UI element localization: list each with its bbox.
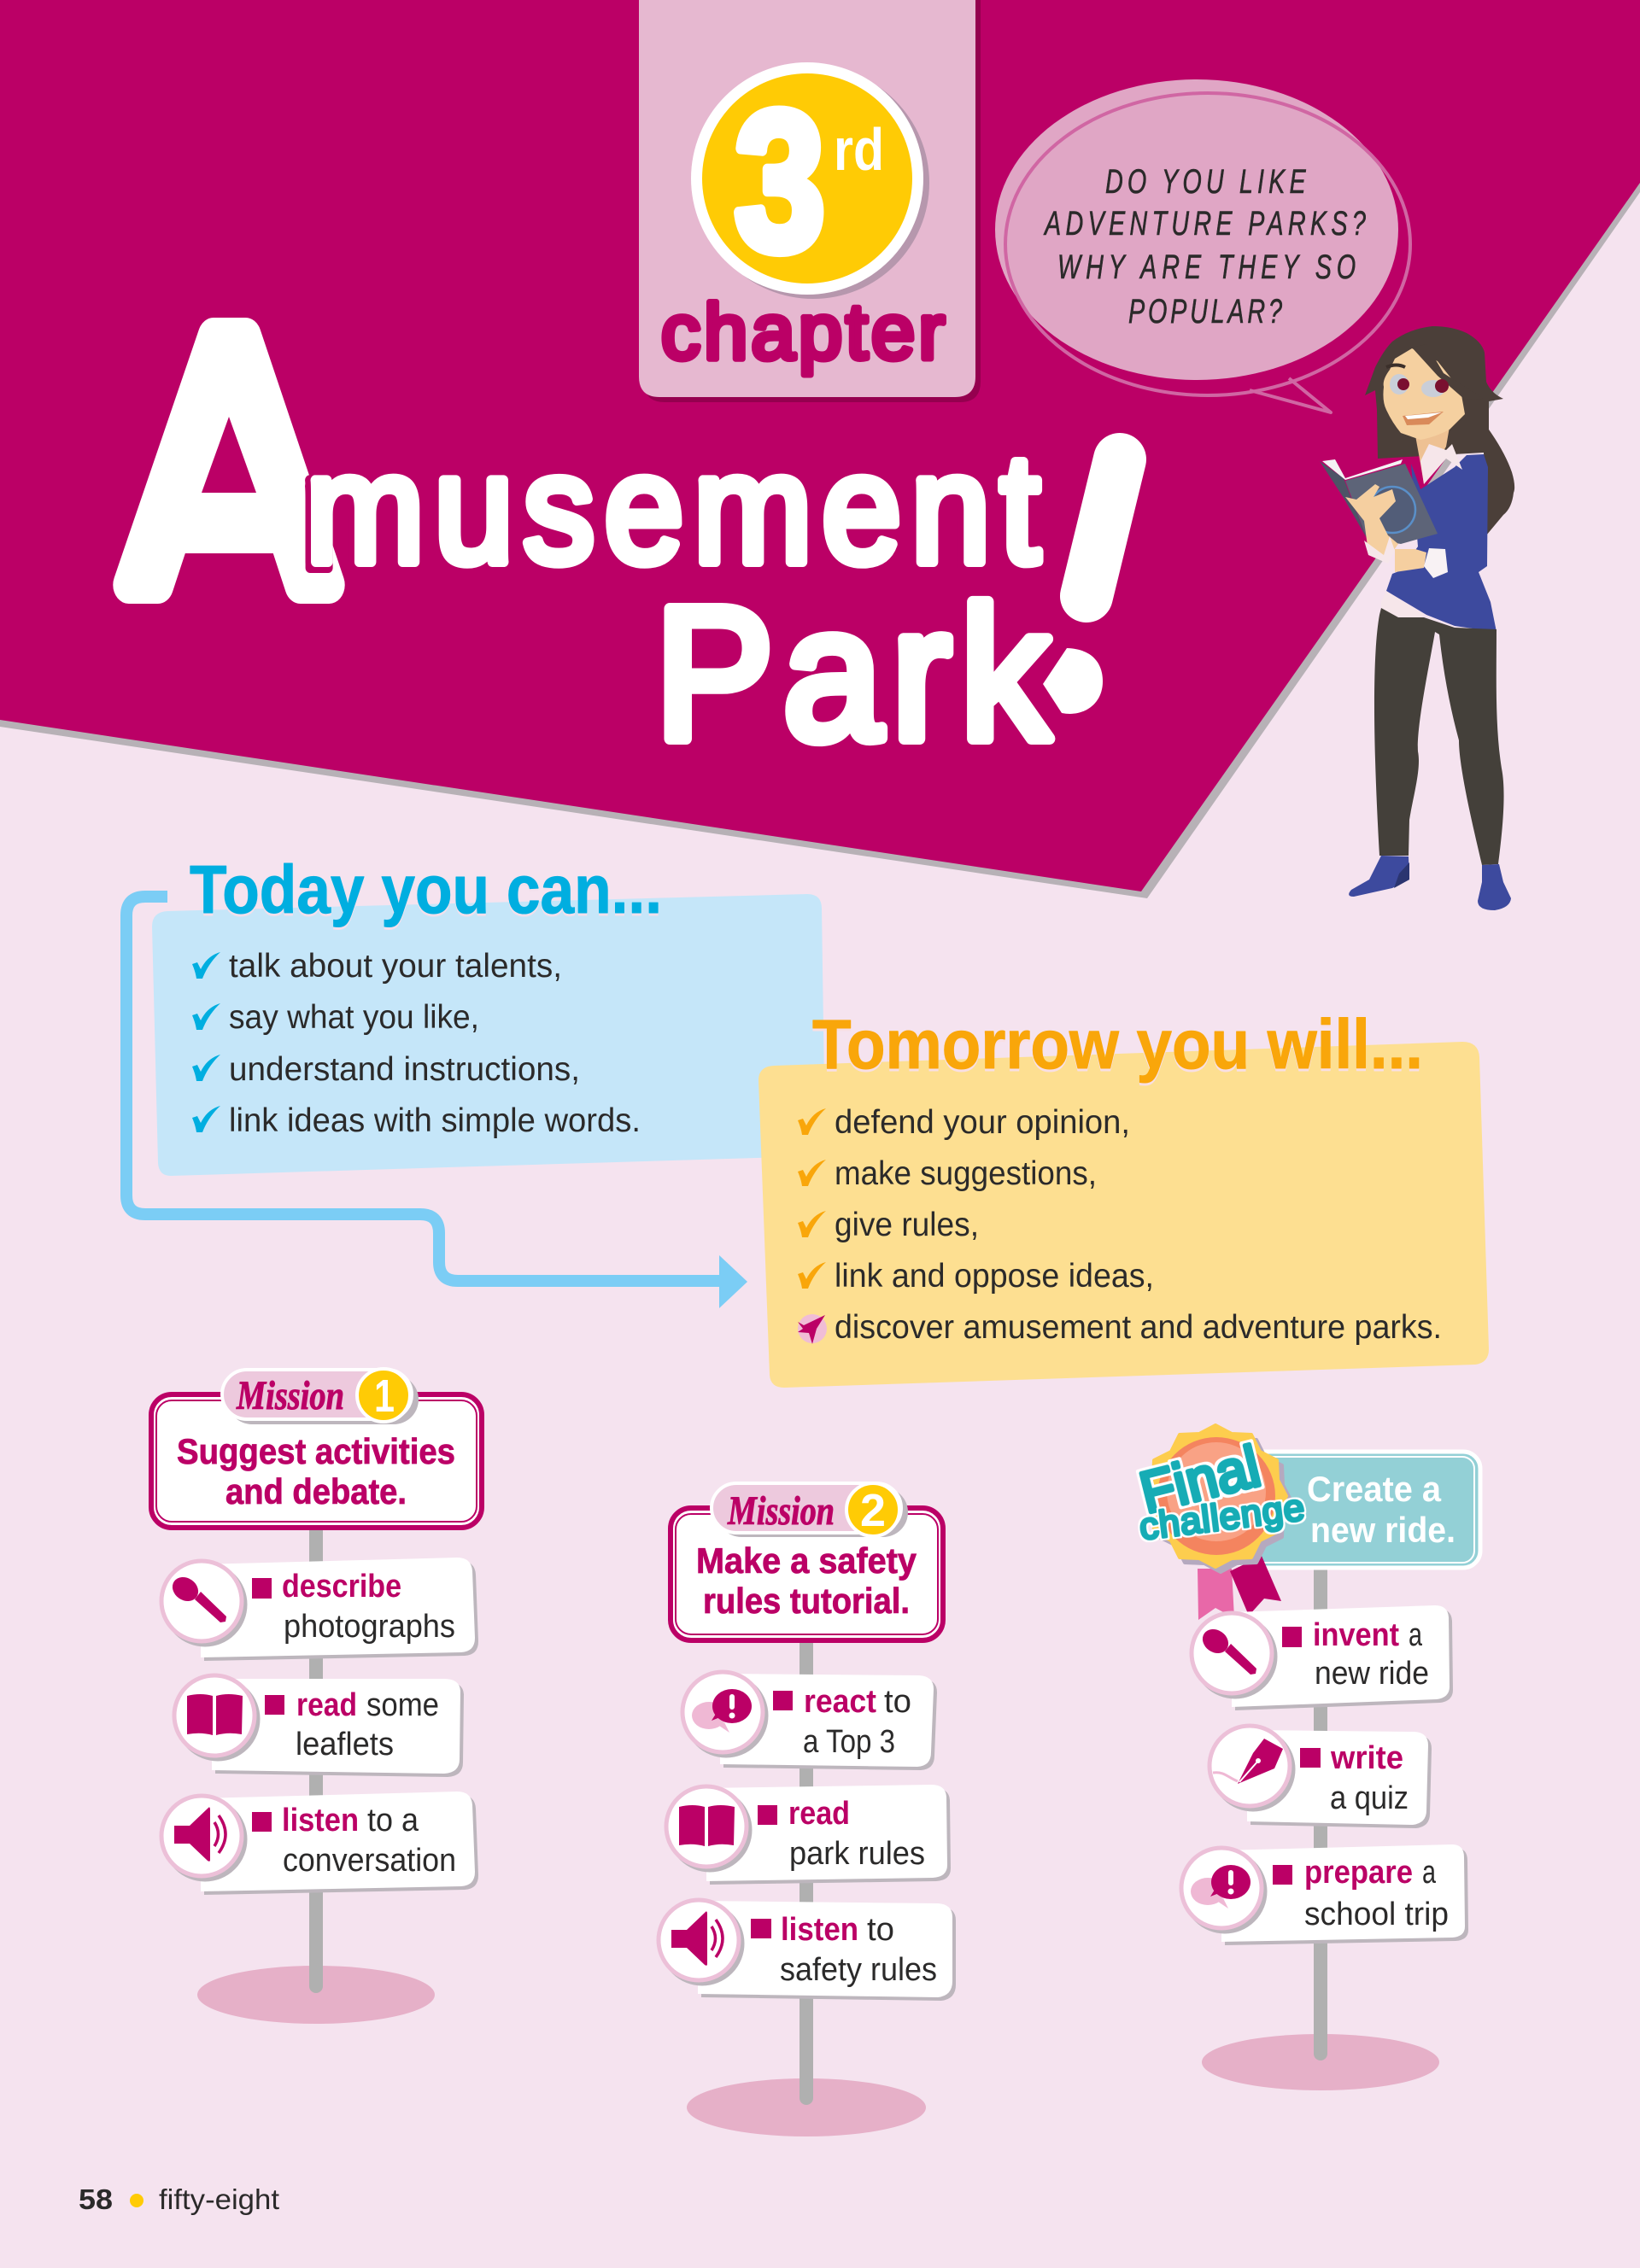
character: teacher holding book bbox=[1320, 326, 1514, 910]
item: listen to a conversation bbox=[161, 1792, 475, 1891]
list: tomorrow skills: link and oppose ideas, bbox=[835, 1258, 1154, 1295]
sign: create a new ride bbox=[1233, 1452, 1480, 1568]
bubble question text: WHY ARE THEY SO bbox=[1057, 248, 1356, 286]
page number footer: 58 bbox=[79, 2183, 113, 2215]
chapter tab bbox=[639, 0, 981, 402]
main title: musement bbox=[306, 423, 1040, 595]
icon: speaker bbox=[161, 1796, 242, 1876]
sign: mission 2: Make a safety bbox=[696, 1540, 917, 1581]
item: read park rules: read bbox=[788, 1796, 850, 1832]
chapter number badge bbox=[691, 62, 929, 299]
item: describe photographs bbox=[161, 1558, 475, 1657]
mission pill: 1 bbox=[374, 1371, 395, 1422]
icon: book bbox=[174, 1675, 255, 1756]
item: invent a new ride bbox=[1192, 1605, 1450, 1707]
list: tomorrow skills: make suggestions, bbox=[835, 1155, 1097, 1192]
mission pill: 2 bbox=[860, 1485, 886, 1536]
icon: book bbox=[666, 1786, 747, 1867]
item: prepare a school trip: school trip bbox=[1304, 1897, 1449, 1932]
big letter A: A bbox=[128, 258, 331, 662]
icon: speech exclamation bbox=[1181, 1848, 1262, 1928]
speech bubble bbox=[995, 79, 1410, 412]
item: describe photographs: photographs bbox=[284, 1609, 455, 1645]
heading: tomorrow you will: Tomorrow you will... bbox=[812, 1006, 1423, 1084]
item: react to a Top 3 bbox=[682, 1672, 934, 1767]
item: prepare a school trip: a bbox=[1422, 1855, 1437, 1891]
sign: mission 1: and debate. bbox=[226, 1471, 407, 1511]
heading: today you can: Today you can... bbox=[190, 851, 662, 927]
badge: final challenge: challenge bbox=[1137, 1487, 1307, 1548]
list: tomorrow skills: give rules, bbox=[835, 1207, 979, 1243]
chapter label: chapter bbox=[661, 289, 945, 376]
list: today skills: say what you like, bbox=[229, 999, 479, 1036]
sign: mission 1: Suggest activities bbox=[177, 1431, 455, 1471]
bubble question text: DO YOU LIKE bbox=[1105, 162, 1306, 201]
icon: microphone bbox=[161, 1561, 242, 1641]
main title: Park bbox=[655, 569, 1050, 779]
item: listen to safety rules: safety rules bbox=[780, 1952, 937, 1988]
item: invent a new ride: a bbox=[1409, 1617, 1423, 1653]
sign: mission 1 bbox=[151, 1369, 482, 1528]
item: listen to a conversation: conversation bbox=[283, 1843, 456, 1879]
item: prepare a school trip: prepare bbox=[1304, 1855, 1413, 1891]
item: listen to safety rules bbox=[659, 1900, 952, 1997]
mission pill: Mission bbox=[727, 1488, 835, 1534]
exclamation mark bbox=[1043, 459, 1120, 714]
item: listen to a conversation: to a bbox=[367, 1803, 419, 1838]
chapter number badge: 3 bbox=[735, 71, 825, 292]
signpost: mission 1 bbox=[151, 1369, 482, 2024]
item: react to a Top 3: a Top 3 bbox=[803, 1724, 895, 1760]
item: listen to safety rules: listen bbox=[781, 1912, 858, 1948]
bubble question text bbox=[1043, 162, 1366, 330]
page number footer: fifty-eight bbox=[159, 2183, 279, 2215]
bubble question text: ADVENTURE PARKS? bbox=[1043, 204, 1366, 243]
icon: microphone bbox=[1192, 1613, 1272, 1693]
list: today skills bbox=[192, 948, 641, 1139]
magenta header banner bbox=[0, 0, 1640, 898]
main title bbox=[128, 258, 1120, 779]
list: today skills: understand instructions, bbox=[229, 1051, 580, 1088]
sign: create a new ride: new ride. bbox=[1310, 1510, 1456, 1550]
list: tomorrow skills: discover amusement and adventure parks. bbox=[835, 1309, 1442, 1346]
signpost: final challenge bbox=[1133, 1425, 1480, 2090]
sign: mission 2 bbox=[671, 1483, 943, 1640]
list: today skills: link ideas with simple words. bbox=[229, 1102, 641, 1139]
panel: today you can bbox=[126, 851, 825, 1308]
item: read park rules: park rules bbox=[789, 1836, 925, 1872]
item: react to a Top 3: to bbox=[884, 1684, 911, 1720]
panel: tomorrow you will bbox=[758, 1006, 1489, 1388]
badge: final challenge: Final bbox=[1133, 1434, 1266, 1526]
icon: plane bbox=[798, 1314, 827, 1344]
chapter number badge: rd bbox=[834, 116, 884, 183]
mission pill: Mission bbox=[236, 1373, 344, 1418]
badge: final challenge bbox=[1133, 1425, 1307, 1620]
item: listen to safety rules: to bbox=[867, 1912, 894, 1948]
bubble question text: POPULAR? bbox=[1128, 292, 1283, 330]
item: read park rules bbox=[666, 1785, 947, 1881]
sign: mission 2: rules tutorial. bbox=[703, 1581, 910, 1621]
item: write a quiz bbox=[1210, 1726, 1428, 1825]
item: read some leaflets bbox=[174, 1675, 460, 1774]
list: today skills: talk about your talents, bbox=[229, 948, 562, 985]
item: describe photographs: describe bbox=[282, 1569, 401, 1605]
mission pill bbox=[222, 1369, 419, 1424]
item: react to a Top 3: react bbox=[804, 1684, 876, 1720]
item: write a quiz: a quiz bbox=[1330, 1780, 1409, 1816]
sign: create a new ride: Create a bbox=[1307, 1469, 1442, 1509]
item: invent a new ride: invent bbox=[1313, 1617, 1399, 1653]
item: read some leaflets: leaflets bbox=[296, 1727, 394, 1762]
icon: fountain pen bbox=[1210, 1726, 1290, 1806]
item: read some leaflets: read bbox=[296, 1687, 357, 1723]
item: prepare a school trip bbox=[1181, 1844, 1465, 1942]
list: tomorrow skills bbox=[798, 1104, 1442, 1346]
mission pill bbox=[712, 1483, 908, 1537]
item: read some leaflets: some bbox=[366, 1687, 439, 1723]
arrow: today to tomorrow bbox=[126, 897, 747, 1308]
page number footer bbox=[79, 2183, 279, 2215]
item: listen to a conversation: listen bbox=[282, 1803, 359, 1838]
icon: speaker bbox=[659, 1900, 739, 1980]
icon: speech exclamation bbox=[682, 1672, 763, 1752]
item: write a quiz: write bbox=[1330, 1740, 1403, 1776]
item: invent a new ride: new ride bbox=[1315, 1656, 1429, 1692]
signpost: mission 2 bbox=[659, 1483, 952, 2136]
list: tomorrow skills: defend your opinion, bbox=[835, 1104, 1130, 1141]
